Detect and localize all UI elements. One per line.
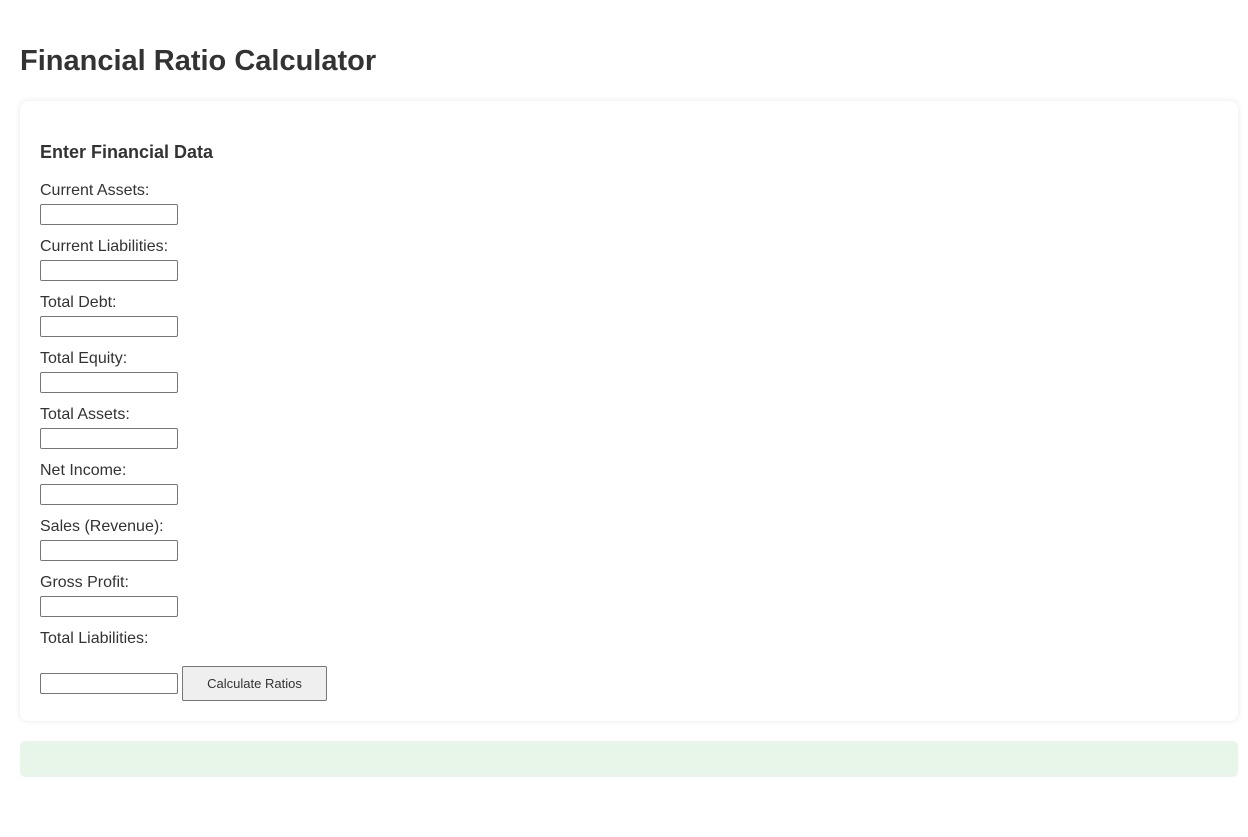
heading: Enter Financial Data: Enter Financial Data [40, 142, 213, 162]
results panel [20, 741, 1238, 777]
label: Total Assets: Total Assets: [40, 406, 130, 423]
input: Current Liabilities [40, 260, 178, 281]
label: Gross Profit: Gross Profit: [40, 574, 129, 591]
label: Total Liabilities: Total Liabilities: [40, 630, 148, 647]
input: Sales [40, 540, 178, 561]
title: Financial Ratio Calculator [20, 45, 376, 77]
label: Current Assets: Current Assets: [40, 182, 149, 199]
label: Current Liabilities: Current Liabilities: [40, 238, 168, 255]
label: Total Equity: Total Equity: [40, 350, 127, 367]
input: Total Debt [40, 316, 178, 337]
input: Total Liabilities [40, 673, 178, 694]
panel: data entry form [20, 101, 1238, 721]
label: Net Income: Net Income: [40, 462, 126, 479]
label: Total Debt: Total Debt: [40, 294, 116, 311]
label: Sales (Revenue): Sales (Revenue): [40, 518, 164, 535]
input: Total Equity [40, 372, 178, 393]
button: Calculate Ratios [182, 666, 327, 701]
input: Net Income [40, 484, 178, 505]
input: Current Assets [40, 204, 178, 225]
input: Gross Profit [40, 596, 178, 617]
input: Total Assets [40, 428, 178, 449]
button: Calculate Ratios: Calculate Ratios [207, 676, 302, 691]
